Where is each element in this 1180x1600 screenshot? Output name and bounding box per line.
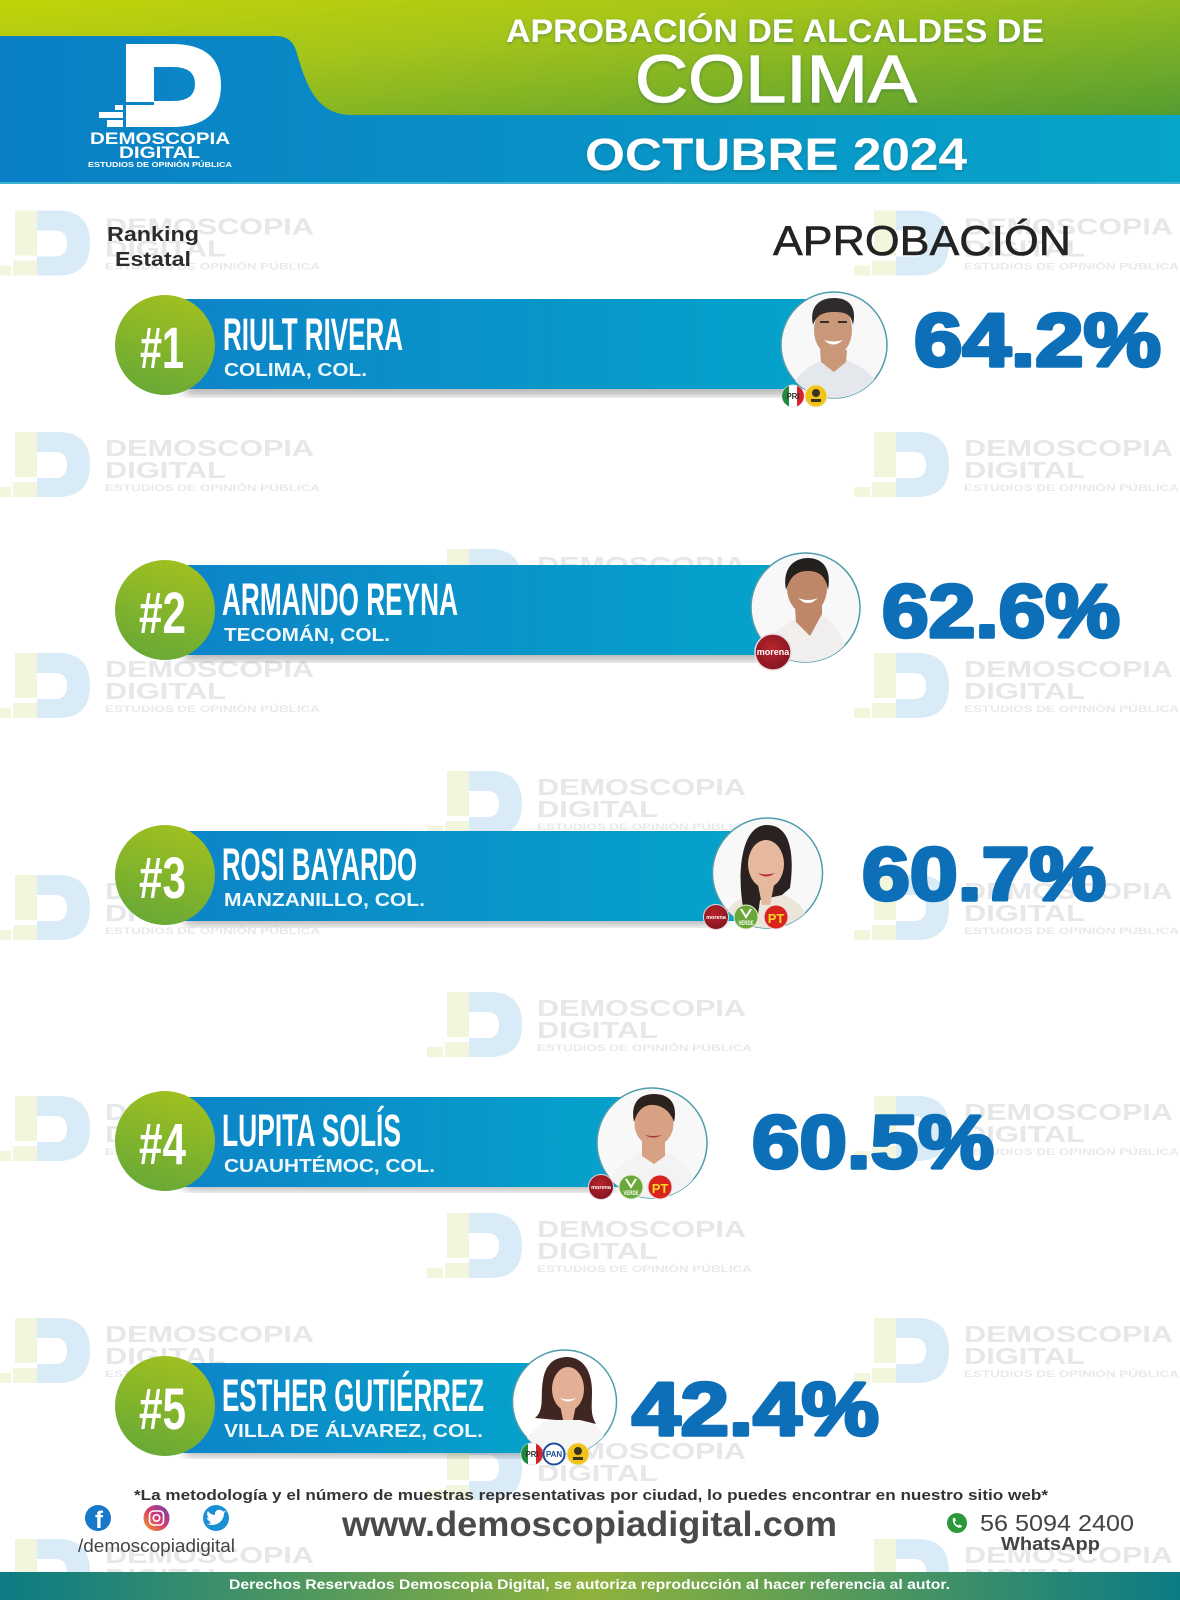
contact (947, 1510, 1134, 1554)
watermark: row 5 right: DEMOSCOPIA (964, 1099, 1173, 1125)
party badges: PT (652, 1181, 668, 1196)
bar (170, 1363, 565, 1453)
portrait (597, 1088, 707, 1205)
watermark: row 4 right: DIGITAL (964, 900, 1085, 926)
watermark: middle 3: DIGITAL (537, 1017, 658, 1043)
bar shadow (185, 1179, 615, 1189)
party badges: morena (591, 1185, 612, 1191)
watermark: row 2 left (0, 432, 321, 497)
watermark: bottom left: DIGITAL (105, 1564, 226, 1590)
copyright text: Derechos Reservados Demoscopia Digital, se autoriza reproducción al hacer referencia al autor. (229, 1577, 950, 1592)
city: CUAUHTÉMOC, COL. (224, 1155, 435, 1176)
bar shadow (185, 384, 795, 394)
watermark: row 6 right: DEMOSCOPIA (964, 1321, 1173, 1347)
city: VILLA DE ÁLVAREZ, COL. (224, 1420, 483, 1441)
portrait (781, 292, 887, 405)
watermark: middle 4: DIGITAL (537, 1238, 658, 1264)
watermark: top left: DIGITAL (105, 236, 226, 262)
bar (170, 565, 805, 655)
watermark: row 4 left (0, 875, 321, 940)
logo wordmark (88, 130, 233, 169)
column heading: ranking: Estatal (115, 248, 191, 271)
portrait (751, 553, 860, 670)
column heading: aprobación: APROBACIÓN (773, 217, 1071, 264)
row 4: Lupita Solís (115, 1088, 994, 1205)
watermark: bottom right (872, 1539, 1173, 1600)
header blue panel (0, 36, 1180, 184)
column heading: ranking: Ranking (107, 223, 199, 246)
watermark: middle 2: DEMOSCOPIA (537, 774, 746, 800)
logo squares (99, 105, 123, 127)
watermark: row 2 right: DIGITAL (964, 457, 1085, 483)
watermark: middle 5: DIGITAL (537, 1460, 658, 1486)
name: ESTHER GUTIÉRREZ (222, 1370, 484, 1421)
watermark: top right: DIGITAL (964, 236, 1085, 262)
logo wordmark: DIGITAL (119, 144, 200, 162)
header bottom edge (0, 182, 1180, 184)
methodology note: *La metodología y el número de muestras representativas por ciudad, lo puedes encontrar en nuestro sitio web* (134, 1487, 1048, 1504)
name: ROSI BAYARDO (222, 839, 417, 890)
watermark: row 3 left (0, 653, 321, 718)
title line 2: COLIMA (635, 42, 917, 117)
website: www.demoscopiadigital.com (341, 1505, 837, 1544)
bar shadow (185, 914, 725, 924)
bar (170, 831, 767, 921)
rank badge: #3 (139, 846, 186, 911)
watermark: middle 5: DEMOSCOPIA (537, 1438, 746, 1464)
watermark: row 6 left: DEMOSCOPIA (105, 1321, 314, 1347)
icon: facebook (85, 1505, 111, 1534)
watermark: row 5 right (854, 1096, 1180, 1161)
percentage: 42.4% (632, 1367, 879, 1451)
watermark: row 6 left: ESTUDIOS DE OPINIÓN PÚBLICA (105, 1368, 321, 1379)
watermark: row 2 right: DEMOSCOPIA (964, 435, 1173, 461)
bar shadow (185, 1445, 525, 1455)
rank badge (115, 295, 215, 395)
rank badge: #5 (139, 1377, 186, 1442)
row 1: Riult Rivera (115, 292, 1161, 407)
watermark: middle 3 (427, 992, 753, 1057)
party badges: PRI (786, 392, 800, 401)
bar (170, 1097, 652, 1187)
rank badge: #4 (139, 1112, 186, 1177)
watermark: top right: ESTUDIOS DE OPINIÓN PÚBLICA (964, 260, 1180, 272)
whatsapp label: WhatsApp (1001, 1534, 1100, 1554)
watermark: row 3 right: ESTUDIOS DE OPINIÓN PÚBLICA (964, 703, 1180, 714)
social handle: /demoscopiadigital (78, 1536, 235, 1556)
icon: instagram (144, 1505, 170, 1531)
watermark: bottom left: DEMOSCOPIA (105, 1542, 314, 1568)
portrait (712, 818, 822, 935)
party badges: morena (706, 915, 727, 921)
watermark: top left: DEMOSCOPIA (105, 214, 314, 240)
date: OCTUBRE 2024 (585, 129, 967, 180)
icon: facebook: f (95, 1507, 104, 1534)
watermark: row 6 left (0, 1318, 321, 1383)
watermark: row 4 right (854, 875, 1180, 940)
row 2: Armando Reyna (115, 553, 1120, 670)
name: LUPITA SOLÍS (222, 1105, 401, 1156)
party badges: PAN (546, 1450, 562, 1459)
watermark: middle 5 (427, 1435, 746, 1500)
party badges (521, 1443, 589, 1465)
watermark: middle 2: ESTUDIOS DE OPINIÓN PÚBLICA (537, 821, 753, 832)
watermark: top left: ESTUDIOS DE OPINIÓN PÚBLICA (105, 260, 321, 272)
row 5: Esther Gutiérrez (115, 1350, 879, 1465)
portrait (512, 1350, 616, 1460)
title line 1: APROBACIÓN DE ALCALDES DE (506, 13, 1044, 49)
name: ARMANDO REYNA (222, 574, 458, 625)
city: TECOMÁN, COL. (224, 624, 390, 645)
party badges: VERDE (624, 1191, 638, 1197)
watermark: row 3 right: DEMOSCOPIA (964, 656, 1173, 682)
watermark: middle 2 (427, 771, 753, 836)
watermark: row 3 left: ESTUDIOS DE OPINIÓN PÚBLICA (105, 703, 321, 714)
watermark: middle 4 (427, 1213, 753, 1278)
city: MANZANILLO, COL. (224, 889, 425, 910)
bar (170, 299, 835, 389)
header green panel (0, 0, 1180, 125)
percentage: 64.2% (914, 298, 1161, 382)
social icons (78, 1505, 235, 1556)
watermark: middle 1: DEMOSCOPIA (537, 552, 746, 578)
watermark: row 4 right: ESTUDIOS DE OPINIÓN PÚBLICA (964, 925, 1180, 936)
footer bar (0, 1572, 1180, 1600)
watermark: middle 2: DIGITAL (537, 796, 658, 822)
watermark: row 2 left: DEMOSCOPIA (105, 435, 314, 461)
percentage: 60.7% (862, 832, 1106, 916)
watermark: middle 3: ESTUDIOS DE OPINIÓN PÚBLICA (537, 1042, 753, 1053)
party badges: VERDE (738, 921, 754, 927)
watermark: row 3 left: DEMOSCOPIA (105, 656, 314, 682)
watermark: top left (0, 210, 321, 276)
watermark: middle 4: DEMOSCOPIA (537, 1216, 746, 1242)
party badges: PT (768, 911, 784, 926)
party badges: PRI (525, 1450, 539, 1459)
column heading: ranking (107, 223, 199, 271)
watermark: top right: DEMOSCOPIA (964, 214, 1173, 240)
watermark: bottom right: DIGITAL (964, 1564, 1085, 1590)
phone number: 56 5094 2400 (980, 1510, 1134, 1536)
logo wordmark: DEMOSCOPIA (90, 130, 230, 148)
watermark: row 5 left: ESTUDIOS DE OPINIÓN PÚBLICA (105, 1146, 321, 1157)
watermark: middle 4: ESTUDIOS DE OPINIÓN PÚBLICA (537, 1263, 753, 1274)
watermark: row 3 left: DIGITAL (105, 678, 226, 704)
rank badge (115, 1356, 215, 1456)
watermark: row 5 right: ESTUDIOS DE OPINIÓN PÚBLICA (964, 1146, 1180, 1157)
watermark: middle 1 (427, 549, 746, 614)
logo mark (126, 44, 221, 127)
header banner (0, 0, 1180, 184)
watermark: row 5 right: DIGITAL (964, 1121, 1085, 1147)
watermark: row 3 right: DIGITAL (964, 678, 1085, 704)
party badges (704, 904, 788, 930)
name: RIULT RIVERA (223, 309, 403, 360)
percentage: 60.5% (752, 1100, 994, 1184)
watermark: row 6 right: ESTUDIOS DE OPINIÓN PÚBLICA (964, 1368, 1180, 1379)
watermark: row 4 left: DEMOSCOPIA (105, 878, 314, 904)
icon: twitter (203, 1505, 229, 1531)
rank badge (115, 560, 215, 660)
rank badge: #1 (140, 316, 184, 381)
icon: whatsapp (947, 1513, 967, 1533)
watermark: top right (854, 210, 1180, 276)
watermark: bottom left (13, 1539, 314, 1600)
party badge: morena: morena (757, 647, 790, 657)
bar shadow (185, 649, 765, 659)
watermark: bottom right: DEMOSCOPIA (964, 1542, 1173, 1568)
watermark: row 6 right: DIGITAL (964, 1343, 1085, 1369)
watermark: row 2 left: DIGITAL (105, 457, 226, 483)
rank badge (115, 825, 215, 925)
watermark: row 6 right (854, 1318, 1180, 1383)
watermark: row 2 right (854, 432, 1180, 497)
watermark: row 3 right (854, 653, 1180, 718)
party badge: morena (755, 634, 791, 670)
watermark: row 5 left (0, 1096, 321, 1161)
watermark: row 4 left: DIGITAL (105, 900, 226, 926)
row 3: Rosi Bayardo (115, 818, 1106, 935)
city: COLIMA, COL. (224, 359, 367, 380)
watermark: row 2 right: ESTUDIOS DE OPINIÓN PÚBLICA (964, 482, 1180, 493)
logo (88, 44, 233, 169)
rank badge: #2 (139, 581, 186, 646)
watermark: row 5 left: DEMOSCOPIA (105, 1099, 314, 1125)
watermark: row 5 left: DIGITAL (105, 1121, 226, 1147)
logo wordmark: ESTUDIOS DE OPINIÓN PÚBLICA (88, 160, 233, 169)
watermark: row 4 right: DEMOSCOPIA (964, 878, 1173, 904)
rank badge (115, 1091, 215, 1191)
watermark: row 6 left: DIGITAL (105, 1343, 226, 1369)
watermark: middle 3: DEMOSCOPIA (537, 995, 746, 1021)
percentage: 62.6% (882, 569, 1120, 653)
party badges (782, 385, 827, 407)
watermark: row 4 left: ESTUDIOS DE OPINIÓN PÚBLICA (105, 925, 321, 936)
party badges (588, 1174, 672, 1200)
watermark: row 2 left: ESTUDIOS DE OPINIÓN PÚBLICA (105, 482, 321, 493)
